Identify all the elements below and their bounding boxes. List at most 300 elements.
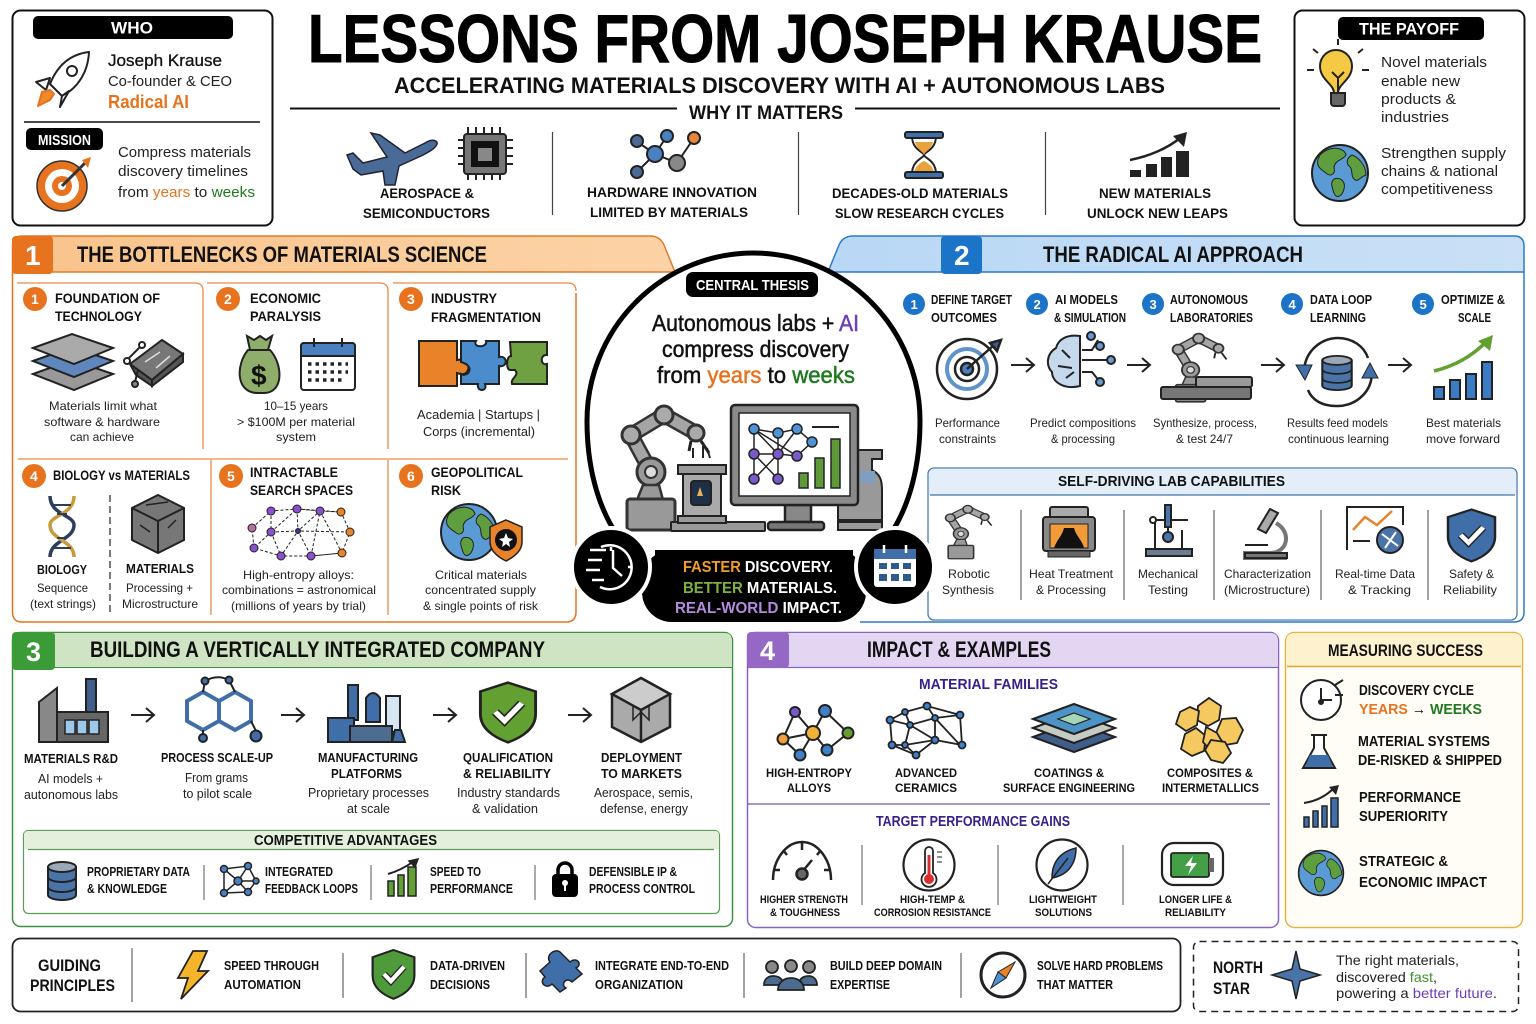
capability: mechanical testing: Mechanical — [1138, 567, 1198, 581]
step: optimize and scale: move forward — [1426, 432, 1500, 446]
advantage: ip: PROCESS CONTROL — [589, 882, 695, 896]
advantage: speed — [388, 859, 513, 896]
text: decades-old: DECADES-OLD MATERIALS — [832, 185, 1008, 201]
step: data loop learning: continuous learning — [1288, 432, 1389, 446]
capability: safety: Safety & — [1449, 567, 1494, 581]
stage: process scale-up — [161, 676, 273, 801]
advantage: loops: FEEDBACK LOOPS — [265, 882, 358, 896]
card: biology vs materials: Processing + — [126, 581, 193, 595]
text: new materials: NEW MATERIALS — [1099, 185, 1211, 201]
stage: qualification — [457, 683, 560, 816]
thesis statement: Autonomous labs + AI — [652, 310, 859, 336]
card: search spaces — [219, 464, 376, 613]
capability: safety: Reliability — [1443, 583, 1497, 597]
metric: performance superiority: SUPERIORITY — [1359, 808, 1448, 825]
stage: materials r&d: autonomous labs — [24, 788, 118, 802]
text: hardware — [587, 184, 757, 220]
principle: speed: SPEED THROUGH — [224, 959, 319, 973]
principle: data-driven: DECISIONS — [430, 978, 490, 992]
icon: growth chart — [1434, 335, 1493, 399]
step: ai models: & SIMULATION — [1054, 310, 1126, 325]
panel: measuring success — [1286, 632, 1522, 928]
family: coatings: COATINGS & — [1034, 766, 1104, 780]
capability: characterization — [1224, 509, 1311, 597]
step: autonomous laboratories: 3 — [1150, 297, 1157, 312]
heading: BUILDING A VERTICALLY INTEGRATED COMPANY — [90, 637, 545, 662]
heading: SELF-DRIVING LAB CAPABILITIES — [1058, 473, 1285, 490]
family: coatings: SURFACE ENGINEERING — [1003, 781, 1135, 795]
step: data loop learning: DATA LOOP — [1310, 292, 1372, 307]
card: foundation: Materials limit what — [49, 399, 158, 413]
icon: material cube — [132, 495, 184, 553]
family: high-entropy alloys — [766, 705, 854, 795]
card: biology vs materials: BIOLOGY — [37, 562, 87, 577]
step: define target outcomes: DEFINE TARGET — [931, 292, 1012, 307]
metric: material systems: MATERIAL SYSTEMS — [1358, 733, 1490, 750]
card: biology vs materials: Microstructure — [122, 597, 198, 611]
advantage: loops: INTEGRATED — [265, 865, 333, 879]
family: coatings — [1003, 704, 1135, 795]
mission text: discovery timelines — [118, 163, 248, 180]
banner — [642, 550, 866, 622]
metric: discovery cycle: DISCOVERY CYCLE — [1359, 682, 1474, 699]
statement: discovered fast, — [1336, 969, 1437, 985]
principle: domain expertise: EXPERTISE — [830, 978, 890, 992]
text: aerospace: SEMICONDUCTORS — [363, 205, 490, 221]
icon: money bag: $ — [251, 360, 267, 391]
stage: manufacturing — [308, 685, 429, 816]
gain: strength — [760, 842, 848, 919]
banner: REAL-WORLD IMPACT. — [675, 600, 842, 617]
metric: material systems — [1303, 733, 1502, 769]
icon: furnace pedestal — [671, 446, 765, 531]
step: define target outcomes: constraints — [939, 432, 996, 446]
panel: self-driving lab capabilities — [928, 468, 1517, 620]
number badge 1 — [12, 236, 53, 274]
arrow — [1388, 358, 1411, 372]
capability: robotic synthesis — [942, 505, 994, 597]
step: data loop learning: LEARNING — [1310, 310, 1366, 325]
step: autonomous laboratories — [1142, 292, 1257, 446]
icon: rocket — [36, 52, 89, 107]
capability: heat treatment: Heat Treatment — [1029, 567, 1114, 581]
card: economic paralysis: ECONOMIC — [250, 290, 321, 306]
advantage: speed: SPEED TO — [430, 865, 481, 879]
card: biology vs materials: Sequence — [37, 581, 88, 595]
text: hardware: HARDWARE INNOVATION — [587, 184, 757, 200]
heading — [1213, 958, 1263, 998]
stage: materials r&d: AI models + — [38, 772, 103, 786]
advantage: data: PROPRIETARY DATA — [87, 865, 190, 879]
card: biology vs materials: MATERIALS — [126, 561, 194, 576]
subheading: material families: MATERIAL FAMILIES — [919, 677, 1058, 693]
card: foundation: FOUNDATION OF — [55, 290, 160, 306]
icon: chip — [458, 127, 513, 180]
gain: temperature: CORROSION RESISTANCE — [874, 907, 991, 919]
stage: deployment: Aerospace, semis, — [594, 786, 693, 800]
step: autonomous laboratories: AUTONOMOUS — [1170, 292, 1248, 307]
number badge 2: 2 — [954, 240, 970, 271]
stage: manufacturing: MANUFACTURING — [318, 750, 418, 765]
principle: data-driven: DATA-DRIVEN — [430, 959, 505, 973]
gain: lightweight: SOLUTIONS — [1035, 907, 1092, 919]
principle: speed: AUTOMATION — [224, 978, 301, 992]
card: fragmentation: INDUSTRY — [431, 290, 498, 306]
icon: monitor — [731, 405, 858, 530]
card: fragmentation: 3 — [407, 291, 415, 307]
icon: puzzle pieces — [419, 341, 547, 390]
metric: strategic impact: STRATEGIC & — [1359, 853, 1448, 870]
advantage: data: & KNOWLEDGE — [87, 882, 167, 896]
card: fragmentation: FRAGMENTATION — [431, 309, 541, 325]
icon: fast clock — [572, 528, 650, 606]
panel: section 2 radical ai approach — [828, 236, 1524, 622]
step: data loop learning: 4 — [1288, 297, 1296, 312]
gain: strength: HIGHER STRENGTH — [760, 894, 848, 906]
step: ai models: AI MODELS — [1055, 292, 1118, 307]
text: novel materials: products & — [1381, 91, 1456, 108]
card: geopolitical risk: RISK — [431, 482, 461, 498]
step: ai models: Predict compositions — [1030, 416, 1136, 430]
step: define target outcomes: OUTCOMES — [931, 310, 997, 325]
metric: strategic impact: ECONOMIC IMPACT — [1359, 874, 1487, 891]
person details — [108, 51, 232, 112]
stage: materials r&d: MATERIALS R&D — [24, 751, 118, 766]
number badge 3 — [12, 632, 55, 670]
gain: long life: LONGER LIFE & — [1159, 894, 1232, 906]
icon: molecule — [631, 130, 700, 178]
principle: integrate — [540, 951, 729, 992]
capability: real-time data: Real-time Data — [1335, 567, 1415, 581]
arrow — [1261, 358, 1284, 372]
card: foundation: software & hardware — [44, 415, 160, 429]
stage: manufacturing: at scale — [347, 802, 390, 816]
metric: discovery cycle — [1301, 680, 1482, 720]
thesis statement: compress discovery — [662, 336, 849, 362]
arrow — [131, 708, 154, 722]
principle: data-driven — [373, 950, 505, 999]
stage: deployment: TO MARKETS — [601, 766, 682, 781]
stage: process scale-up: to pilot scale — [183, 787, 252, 801]
mission text: Compress materials — [118, 144, 251, 161]
card: biology vs materials — [22, 464, 198, 615]
icon: target — [937, 339, 1001, 399]
thesis statement — [652, 310, 859, 388]
text: decades-old: SLOW RESEARCH CYCLES — [835, 205, 1004, 221]
card: geopolitical risk: GEOPOLITICAL — [431, 464, 523, 480]
person details: Joseph Krause — [108, 51, 222, 70]
subheading: target performance gains: TARGET PERFORMANCE GAINS — [876, 814, 1070, 830]
icon: layers — [33, 334, 113, 390]
gain: strength: & TOUGHNESS — [770, 907, 840, 919]
step: optimize and scale — [1412, 292, 1505, 446]
heading: NORTH — [1213, 958, 1263, 977]
stage: process scale-up: PROCESS SCALE-UP — [161, 750, 273, 765]
gain: long life: RELIABILITY — [1165, 907, 1227, 919]
family: advanced ceramics: CERAMICS — [895, 781, 957, 795]
principle: domain expertise — [764, 959, 942, 992]
number badge 4 — [747, 632, 789, 668]
family: composites: INTERMETALLICS — [1162, 781, 1259, 795]
capability: mechanical testing: Testing — [1148, 583, 1188, 597]
card: economic paralysis: 10–15 years — [264, 399, 328, 413]
card: foundation: can achieve — [70, 430, 134, 444]
card: search spaces: combinations = astronomical — [222, 583, 376, 597]
advantage: speed: PERFORMANCE — [430, 882, 513, 896]
arrow — [1011, 358, 1034, 372]
heading: PRINCIPLES — [30, 977, 115, 995]
step: define target outcomes: 1 — [910, 297, 918, 312]
thesis statement: from years to weeks — [657, 362, 855, 388]
number badge 1: 1 — [25, 240, 41, 271]
stage: manufacturing: PLATFORMS — [331, 766, 402, 781]
icon: molecule rings — [187, 676, 262, 742]
stage: manufacturing: Proprietary processes — [308, 786, 429, 800]
stage: deployment: DEPLOYMENT — [601, 750, 682, 765]
gain: temperature: HIGH-TEMP & — [900, 894, 965, 906]
gain: long life — [1159, 843, 1232, 919]
panel: who — [12, 10, 272, 226]
icon: target — [37, 157, 91, 211]
mission text: from years to weeks — [118, 184, 255, 201]
text: novel materials: industries — [1381, 109, 1449, 126]
heading: MEASURING SUCCESS — [1328, 641, 1483, 660]
metric: discovery cycle: YEARS → WEEKS — [1359, 701, 1482, 718]
text: novel materials: Novel materials — [1381, 54, 1487, 71]
capability: heat treatment: & Processing — [1036, 583, 1106, 597]
panel: section 3 building a company — [12, 632, 732, 926]
stage: process scale-up: From grams — [185, 771, 248, 785]
text: new materials — [1087, 185, 1228, 221]
principle: hard problems: THAT MATTER — [1037, 978, 1113, 992]
icon: globe — [1312, 145, 1368, 201]
metric: strategic impact — [1299, 851, 1487, 895]
advantage: ip — [552, 863, 695, 897]
step: autonomous laboratories: Synthesize, process, — [1153, 416, 1257, 430]
advantage: ip: DEFENSIBLE IP & — [589, 865, 677, 879]
icon: star — [1272, 951, 1320, 999]
icon: shield check — [480, 683, 536, 742]
heading: STAR — [1213, 979, 1250, 998]
heading: THE RADICAL AI APPROACH — [1043, 242, 1303, 267]
card: search spaces: 5 — [227, 468, 235, 484]
card: economic paralysis — [216, 287, 355, 444]
principle: integrate: INTEGRATE END-TO-END — [595, 959, 729, 973]
card: economic paralysis: > $100M per material — [237, 415, 355, 429]
stage: materials r&d — [24, 679, 118, 802]
text: novel materials — [1381, 54, 1487, 126]
advantage: data — [48, 862, 190, 900]
card: foundation — [23, 287, 183, 444]
stage: qualification: Industry standards — [457, 786, 560, 800]
banner: BETTER MATERIALS. — [683, 580, 837, 597]
statement — [1336, 952, 1497, 1001]
step: ai models: & processing — [1051, 432, 1115, 446]
heading: why it matters: WHY IT MATTERS — [689, 103, 843, 124]
family: high-entropy alloys: HIGH-ENTROPY — [766, 766, 852, 780]
capability: safety — [1443, 510, 1497, 597]
text: supply chains — [1381, 145, 1507, 198]
step: data loop learning: Results feed models — [1287, 416, 1388, 430]
icon: money bag — [240, 336, 279, 393]
advantage: loops — [220, 862, 358, 896]
capability: characterization: Characterization — [1224, 567, 1311, 581]
step: define target outcomes — [903, 292, 1012, 446]
card: search spaces: SEARCH SPACES — [250, 482, 353, 498]
person details: Co-founder & CEO — [108, 73, 232, 90]
panel: north star — [1194, 942, 1518, 1012]
capability: robotic synthesis: Synthesis — [942, 583, 994, 597]
person details: Radical AI — [108, 92, 189, 112]
step: optimize and scale: Best materials — [1426, 416, 1501, 430]
text: aerospace: AEROSPACE & — [380, 185, 474, 201]
card: economic paralysis: PARALYSIS — [250, 308, 321, 324]
arrow — [281, 708, 304, 722]
card: fragmentation: Academia | Startups | — [417, 408, 540, 422]
icon: ai brain — [1048, 332, 1115, 387]
card: biology vs materials: BIOLOGY vs MATERIALS — [53, 468, 190, 483]
heading: THE BOTTLENECKS OF MATERIALS SCIENCE — [77, 242, 487, 267]
gain: lightweight — [1029, 840, 1097, 919]
metric: performance superiority — [1304, 785, 1461, 827]
step: optimize and scale: 5 — [1420, 297, 1427, 312]
step: autonomous laboratories: & test 24/7 — [1176, 432, 1233, 446]
principle: hard problems: SOLVE HARD PROBLEMS — [1037, 959, 1163, 973]
statement: powering a better future . — [1336, 985, 1497, 1001]
capability: heat treatment — [1029, 507, 1114, 597]
heading: GUIDING — [38, 957, 101, 975]
stage: qualification: & RELIABILITY — [463, 766, 551, 781]
card: economic paralysis: 2 — [224, 291, 232, 307]
thesis label — [686, 272, 818, 297]
card: geopolitical risk: 6 — [407, 468, 415, 484]
who label: WHO — [111, 18, 153, 38]
step: optimize and scale: OPTIMIZE & — [1441, 292, 1505, 307]
panel: the payoff — [1294, 10, 1524, 226]
icon: reagent bottle — [838, 450, 882, 530]
payoff label: THE PAYOFF — [1359, 20, 1459, 38]
text: supply chains: Strengthen supply — [1381, 145, 1507, 162]
capability: robotic synthesis: Robotic — [948, 567, 990, 581]
icon: calendar — [856, 528, 934, 606]
principle: hard problems — [981, 953, 1163, 997]
step: ai models: 2 — [1034, 297, 1041, 312]
panel: section 4 impact and examples — [747, 632, 1278, 928]
card: search spaces: High-entropy alloys: — [243, 568, 354, 582]
icon: manufacturing plant — [328, 685, 405, 742]
card: geopolitical risk: concentrated supply — [425, 583, 536, 597]
capability: mechanical testing — [1138, 505, 1198, 597]
card: biology vs materials: 4 — [30, 468, 38, 484]
metric: material systems: DE-RISKED & SHIPPED — [1358, 752, 1502, 769]
heading — [30, 957, 115, 995]
panel: central thesis — [572, 253, 934, 622]
family: advanced ceramics: ADVANCED — [895, 766, 957, 780]
icon: lab robot — [1161, 334, 1252, 402]
monitor chart — [749, 424, 840, 488]
family: composites — [1162, 698, 1259, 795]
number badge 3: 3 — [26, 637, 41, 667]
card: fragmentation: Corps (incremental) — [423, 425, 535, 439]
arrow — [1127, 358, 1150, 372]
icon: light bulb — [1307, 39, 1369, 106]
icon: factory — [39, 679, 108, 742]
icon: calendar — [301, 338, 355, 390]
stage: qualification: & validation — [472, 802, 538, 816]
subtitle: ACCELERATING MATERIALS DISCOVERY WITH AI + AUTONOMOUS LABS — [394, 73, 1165, 98]
icon: robot arm — [622, 406, 709, 530]
arrow — [568, 708, 591, 722]
step: ai models — [1026, 292, 1136, 446]
card: search spaces: INTRACTABLE — [250, 464, 338, 480]
panel: why it matters items — [347, 127, 1228, 221]
who label — [33, 16, 233, 39]
principle: speed — [178, 951, 319, 999]
text: new materials: UNLOCK NEW LEAPS — [1087, 205, 1228, 221]
text: novel materials: enable new — [1381, 73, 1460, 90]
payoff label — [1338, 17, 1484, 40]
number badge 4: 4 — [760, 636, 775, 666]
arrow — [433, 708, 456, 722]
metric: performance superiority: PERFORMANCE — [1359, 789, 1461, 806]
card: search spaces: (millions of years by trial) — [231, 599, 366, 613]
principle: domain expertise: BUILD DEEP DOMAIN — [830, 959, 942, 973]
mission label — [26, 128, 103, 150]
card: fragmentation — [399, 287, 547, 439]
icon: hourglass — [905, 132, 943, 178]
principle: integrate: ORGANIZATION — [595, 978, 683, 992]
panel: competitive advantages — [24, 830, 720, 914]
capability: real-time data: & Tracking — [1348, 583, 1411, 597]
icon: search network — [248, 505, 354, 560]
icon: package — [612, 678, 670, 742]
card: geopolitical risk — [399, 464, 539, 613]
family: high-entropy alloys: ALLOYS — [787, 781, 831, 795]
banner: FASTER DISCOVERY. — [683, 559, 833, 576]
card: foundation: TECHNOLOGY — [55, 308, 143, 324]
icon: airplane — [347, 133, 437, 185]
card: geopolitical risk: & single points of risk — [423, 599, 539, 613]
text: decades-old — [832, 185, 1008, 221]
thesis label: CENTRAL THESIS — [696, 277, 809, 294]
icon: shield star — [490, 520, 522, 561]
stage: deployment: defense, energy — [600, 802, 689, 816]
icon: circuit block — [124, 340, 183, 387]
stage: qualification: QUALIFICATION — [463, 750, 553, 765]
gain: lightweight: LIGHTWEIGHT — [1029, 894, 1097, 906]
family: composites: COMPOSITES & — [1167, 766, 1253, 780]
icon: dna helix — [50, 496, 74, 557]
panel: guiding principles — [12, 938, 1180, 1012]
mission text — [118, 144, 255, 201]
capability: characterization: (Microstructure) — [1224, 583, 1310, 597]
panel: section 1 bottlenecks — [12, 236, 675, 622]
mission label: MISSION — [38, 133, 91, 149]
title: LESSONS FROM JOSEPH KRAUSE — [308, 1, 1262, 77]
family: advanced ceramics — [886, 702, 966, 795]
text: supply chains: competitiveness — [1381, 181, 1493, 198]
gain: temperature — [874, 840, 991, 919]
text: supply chains: chains & national — [1381, 163, 1498, 180]
step: optimize and scale: SCALE — [1458, 310, 1491, 325]
step: autonomous laboratories: LABORATORIES — [1170, 310, 1253, 325]
step: define target outcomes: Performance — [935, 416, 1000, 430]
heading: COMPETITIVE ADVANTAGES — [254, 833, 437, 849]
icon: data loop — [1296, 338, 1378, 406]
text: hardware: LIMITED BY MATERIALS — [590, 204, 748, 220]
step: data loop learning — [1281, 292, 1389, 446]
text: aerospace — [363, 185, 490, 221]
